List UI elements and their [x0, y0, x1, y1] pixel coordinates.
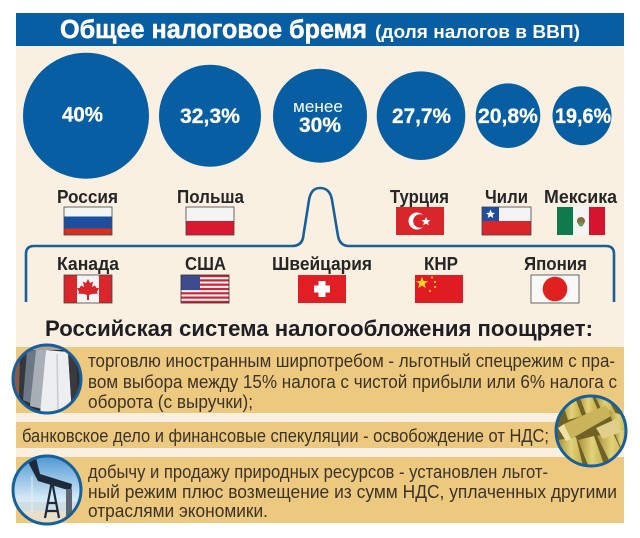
country: Chile [482, 186, 531, 235]
country: China: КНР [424, 253, 458, 274]
bubble: Mexico 19,6% [552, 86, 612, 145]
bubble: Russia 40%: 40% [62, 104, 103, 126]
bubble: Poland 32,3% [159, 65, 261, 167]
country: Switzerland: Швейцария [272, 253, 372, 274]
country: Poland [177, 186, 245, 235]
band: natural resources: ный режим плюс возмещение из сумм НДС, уплаченных другими [88, 481, 617, 502]
country: Russia: Россия [57, 186, 118, 207]
bubble: less than 30%: менее [293, 97, 343, 116]
bubble: Russia 40% [23, 53, 149, 179]
icon: oil pump jack [12, 454, 82, 526]
bubble: Turkey 27,7%: 27,7% [392, 105, 451, 128]
band: natural resources: отраслями экономики. [88, 500, 268, 521]
band: natural resources [16, 457, 624, 523]
country: Mexico [544, 186, 618, 235]
band: consumer goods trade [16, 347, 624, 413]
heading: Russian tax system encourages: Российская система налогообложения поощряет: [45, 316, 593, 341]
country: China [415, 253, 463, 303]
country: Japan [524, 253, 587, 303]
country: Turkey: Турция [390, 186, 449, 207]
country: USA: США [185, 253, 226, 274]
bubble: Mexico 19,6%: 19,6% [555, 105, 611, 128]
bubble: Poland 32,3%: 32,3% [180, 105, 240, 128]
country: Canada [57, 253, 120, 303]
bubble chart: tax burden [23, 53, 612, 179]
band: natural resources: добычу и продажу природных ресурсов - установлен льгот- [88, 461, 548, 482]
country: Chile: Чили [485, 186, 528, 207]
title banner: Общее налоговое бремя [60, 16, 367, 44]
title banner: (доля налогов в ВВП) [375, 22, 580, 42]
band: consumer goods trade: оборота (с выручки); [88, 391, 253, 412]
bubble: Chile 20,8% [476, 83, 540, 148]
bubble: Chile 20,8%: 20,8% [478, 105, 538, 128]
bracket line for the 30% group [26, 188, 614, 302]
bubble: Turkey 27,7% [377, 71, 465, 160]
country: Japan: Япония [524, 253, 587, 274]
country: Turkey [390, 186, 449, 235]
bubble: less than 30% [273, 69, 367, 163]
country: Russia [57, 186, 118, 235]
bubble: less than 30%: 30% [299, 114, 341, 137]
icon: clothes on a rack [12, 344, 82, 414]
country: Mexico: Мексика [544, 186, 618, 207]
country: USA [181, 253, 229, 303]
title banner [16, 13, 624, 46]
band: banking and speculation: банковское дело и финансовые спекуляции - освобождение от НДС; [22, 425, 549, 446]
icon: gold bars [555, 392, 628, 470]
country: Canada: Канада [57, 253, 120, 274]
country: Switzerland [272, 253, 372, 303]
country: Poland: Польша [177, 186, 245, 207]
